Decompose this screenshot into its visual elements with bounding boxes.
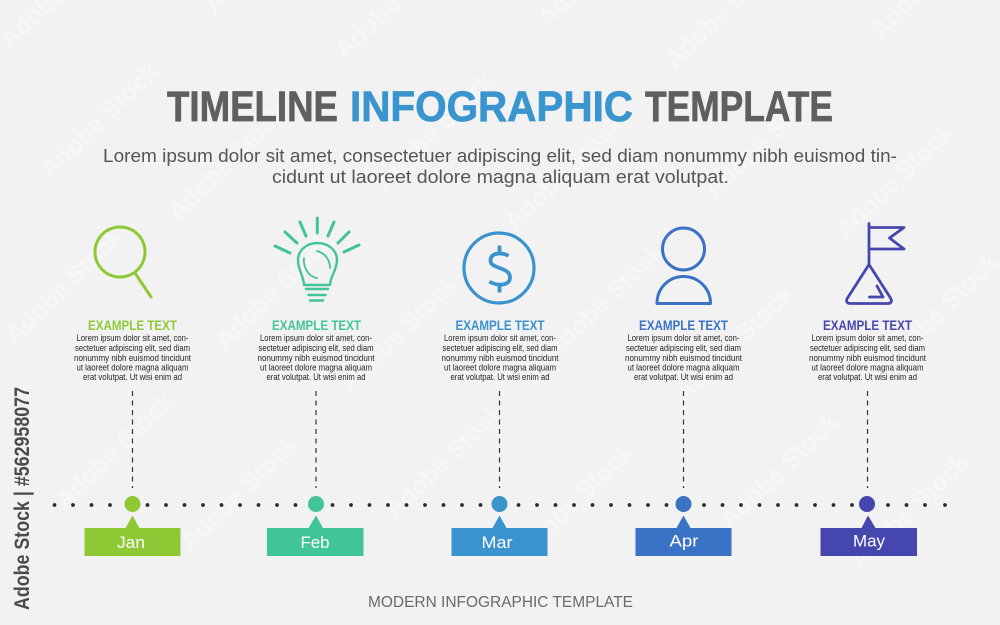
month tag: February: Feb: [300, 533, 330, 552]
text: Adobe Stock: [163, 100, 292, 226]
heading: April: EXAMPLE TEXT: [639, 318, 729, 333]
text block: February: sectetuer adipiscing elit, sed diam: [258, 343, 374, 353]
text: Adobe Stock: [175, 430, 304, 556]
text block: May: [809, 333, 926, 382]
heading: March: EXAMPLE TEXT: [456, 318, 545, 333]
text block: February: erat volutpat. Ut wisi enim ad: [266, 372, 366, 382]
dotted timeline: [53, 503, 947, 507]
panel: February: [258, 218, 375, 556]
month tag: March: [452, 516, 548, 556]
panel: March: [442, 233, 559, 556]
text: Adobe Stock: [540, 238, 669, 364]
icon: person: [657, 228, 710, 304]
title: TIMELINE: [167, 84, 338, 131]
text: Adobe Stock: [510, 438, 639, 564]
text block: May: erat volutpat. Ut wisi enim ad: [818, 372, 917, 382]
text block: March: nonummy nibh euismod tincidunt: [442, 353, 559, 363]
text: Adobe Stock: [50, 388, 179, 514]
text block: March: [442, 333, 559, 382]
month tag: May: May: [853, 532, 885, 550]
subtitle text block: [103, 145, 897, 187]
text block: March: sectetuer adipiscing elit, sed diam: [442, 343, 558, 353]
text: Adobe Stock: [335, 270, 464, 396]
month tag: April: [636, 516, 732, 556]
text block: January: [74, 333, 191, 382]
connector: March: [498, 391, 500, 488]
text: Adobe Stock: [370, 68, 499, 194]
text block: March: Lorem ipsum dolor sit amet, con-: [444, 333, 556, 343]
text block: January: nonummy nibh euismod tincidunt: [74, 353, 191, 363]
text: Adobe Stock: [210, 228, 339, 354]
stock credit: Adobe Stock | #562958077: [11, 387, 34, 610]
text block: May: nonummy nibh euismod tincidunt: [809, 353, 926, 363]
title: TEMPLATE: [645, 84, 833, 131]
connector: February: [315, 391, 317, 488]
text block: April: nonummy nibh euismod tincidunt: [625, 353, 742, 363]
month tag: January: Jan: [117, 533, 145, 552]
title: INFOGRAPHIC: [350, 84, 633, 131]
text block: February: ut laoreet dolore magna aliquam: [260, 362, 372, 372]
icon: dollar coin: [464, 233, 534, 303]
subtitle text block: cidunt ut laoreet dolore magna aliquam erat volutpat.: [272, 166, 729, 187]
text block: February: Lorem ipsum dolor sit amet, con-: [260, 333, 372, 343]
text block: January: erat volutpat. Ut wisi enim ad: [83, 372, 182, 382]
subtitle text block: Lorem ipsum dolor sit amet, consectetuer adipiscing elit, sed diam nonummy nibh euismod tin-: [103, 145, 897, 166]
marker: January: [124, 496, 140, 512]
text block: April: sectetuer adipiscing elit, sed diam: [626, 343, 741, 353]
marker: May: [859, 496, 875, 512]
panel: May: [809, 224, 926, 556]
text block: February: [258, 333, 375, 382]
title: [167, 84, 833, 131]
text: Adobe Stock: [500, 110, 629, 236]
text: Adobe Stock: [715, 408, 844, 534]
panel: January: [74, 227, 191, 556]
icon: light bulb: [275, 218, 359, 300]
heading: May: EXAMPLE TEXT: [823, 318, 913, 333]
text block: January: Lorem ipsum dolor sit amet, con-: [76, 333, 188, 343]
heading: January: EXAMPLE TEXT: [88, 318, 178, 333]
text: Adobe Stock: [380, 398, 509, 524]
text block: March: erat volutpat. Ut wisi enim ad: [450, 372, 550, 382]
icon: flag on mountain: [847, 224, 904, 304]
connector: May: [866, 391, 868, 488]
text: Adobe Stock: [700, 78, 829, 204]
text block: May: ut laoreet dolore magna aliquam: [812, 362, 924, 372]
text block: May: Lorem ipsum dolor sit amet, con-: [812, 333, 924, 343]
month tag: February: [267, 516, 364, 556]
text: Adobe Stock: [35, 58, 164, 184]
month tag: January: [84, 516, 180, 556]
connector: January: [132, 391, 134, 488]
month tag: March: Mar: [482, 533, 513, 552]
text block: April: [625, 333, 742, 382]
text: Adobe Stock: [845, 448, 974, 574]
month tag: May: [820, 516, 917, 556]
text block: March: ut laoreet dolore magna aliquam: [444, 362, 556, 372]
marker: April: [676, 496, 692, 512]
text block: April: erat volutpat. Ut wisi enim ad: [634, 372, 733, 382]
heading: February: EXAMPLE TEXT: [272, 318, 362, 333]
text block: April: ut laoreet dolore magna aliquam: [628, 362, 740, 372]
text block: April: Lorem ipsum dolor sit amet, con-: [628, 333, 740, 343]
text: Adobe Stock: [830, 118, 959, 244]
marker: February: [308, 496, 324, 512]
footer caption: MODERN INFOGRAPHIC TEMPLATE: [368, 594, 633, 611]
panel: April: [625, 228, 742, 556]
text block: January: sectetuer adipiscing elit, sed diam: [75, 343, 190, 353]
text: Adobe Stock: [670, 280, 799, 406]
text: Adobe Stock: [0, 223, 129, 349]
month tag: April: Apr: [670, 532, 699, 550]
icon: magnifier: [95, 227, 151, 297]
text block: May: sectetuer adipiscing elit, sed diam: [810, 343, 925, 353]
marker: March: [492, 496, 508, 512]
connector: April: [682, 391, 684, 488]
text block: February: nonummy nibh euismod tincidunt: [258, 353, 375, 363]
text block: January: ut laoreet dolore magna aliquam: [76, 362, 189, 372]
